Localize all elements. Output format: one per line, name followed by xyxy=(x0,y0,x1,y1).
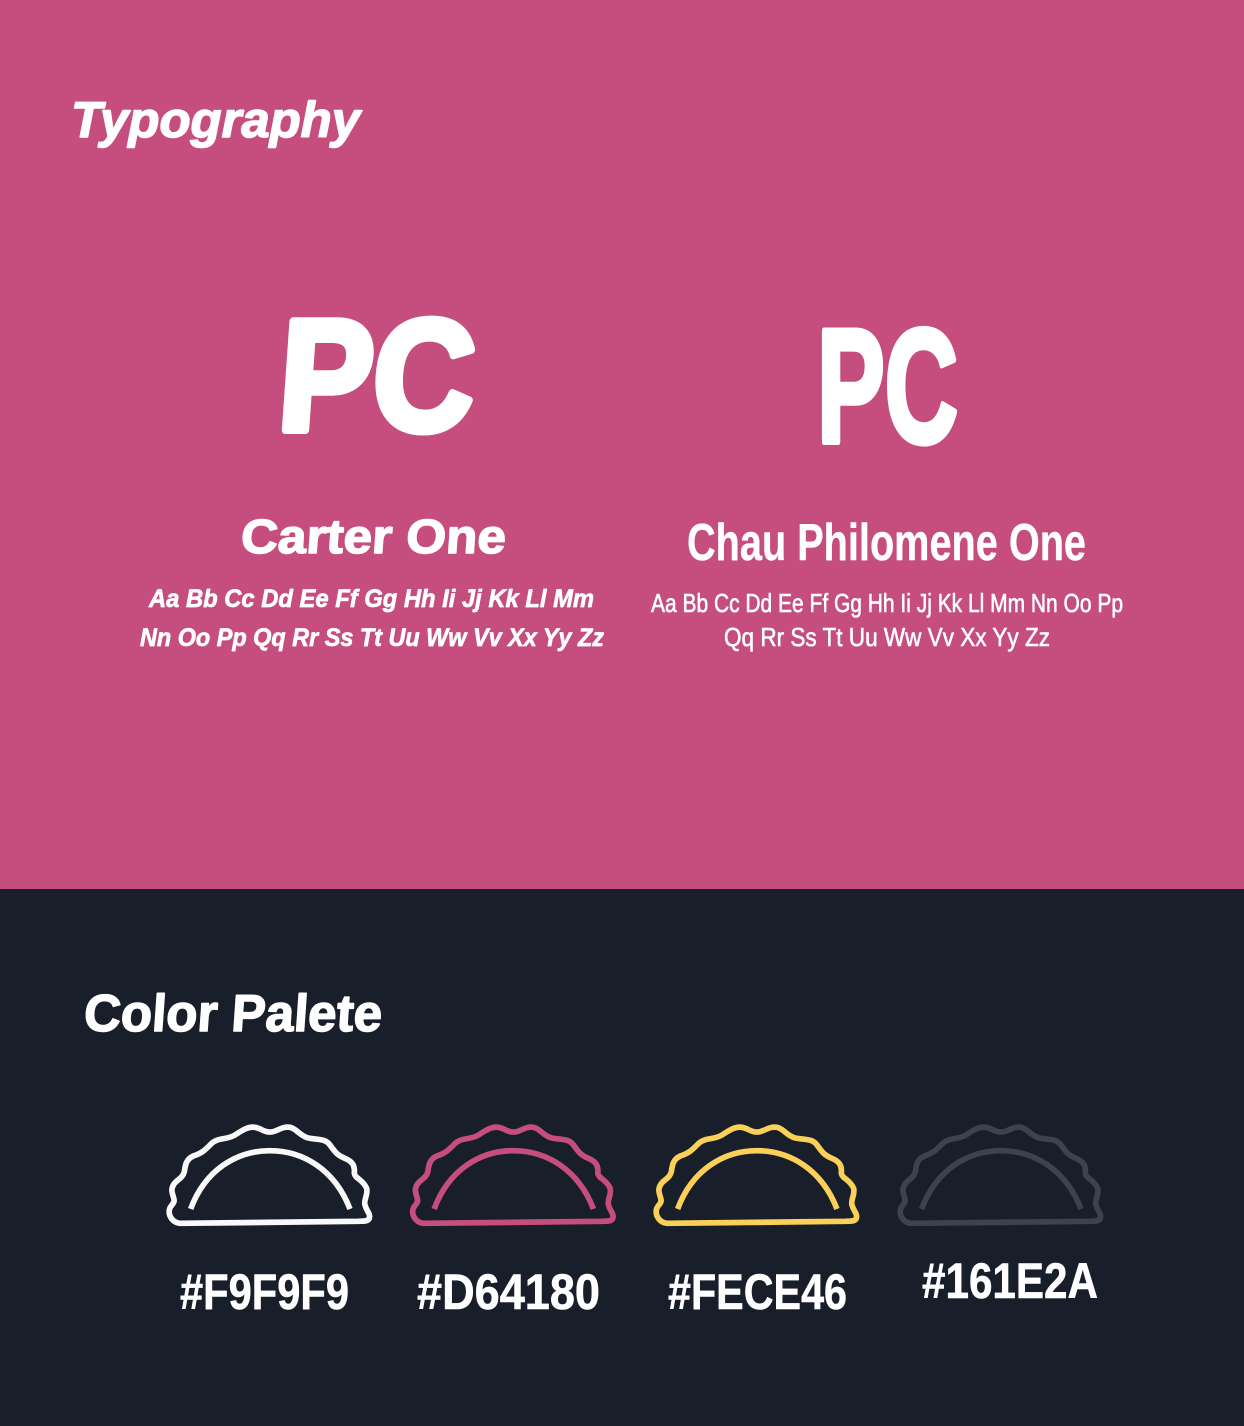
glyph sample: Carter One PC: PC xyxy=(274,287,481,464)
alphabet: Chau Philomene One: Aa Bb Cc Dd Ee Ff Gg Hh Ii Jj Kk Ll Mm Nn Oo Pp xyxy=(651,588,1123,618)
font specimen: Carter One xyxy=(140,287,604,652)
heading: Color Palete: Color Palete xyxy=(82,985,384,1043)
alphabet: Chau Philomene One xyxy=(651,588,1123,652)
alphabet: Carter One xyxy=(140,585,604,652)
icon: yellow empanada xyxy=(656,1127,857,1223)
alphabet: Carter One: Nn Oo Pp Qq Rr Ss Tt Uu Ww Vv Xx Yy Zz xyxy=(140,624,604,652)
font name: Carter One: Carter One xyxy=(239,511,508,564)
icon: pink empanada xyxy=(413,1127,613,1223)
label: #FECE46: #FECE46 xyxy=(668,1264,847,1320)
alphabet: Chau Philomene One: Qq Rr Ss Tt Uu Ww Vv Xx Yy Zz xyxy=(724,622,1050,652)
label: #F9F9F9: #F9F9F9 xyxy=(180,1264,349,1320)
panel: color palette background xyxy=(0,889,1244,1426)
font specimen: Chau Philomene One xyxy=(651,296,1123,652)
glyph sample: Chau Philomene One PC: PC xyxy=(817,296,958,477)
heading: Typography: Typography xyxy=(71,92,362,148)
icon: white empanada xyxy=(169,1127,370,1223)
panel: typography background xyxy=(0,0,1244,889)
label: #161E2A: #161E2A xyxy=(922,1253,1098,1309)
font name: Chau Philomene One: Chau Philomene One xyxy=(687,514,1086,572)
alphabet: Carter One: Aa Bb Cc Dd Ee Ff Gg Hh Ii Jj Kk Ll Mm xyxy=(148,585,594,613)
label: #D64180: #D64180 xyxy=(417,1264,600,1320)
icon: dark grey empanada xyxy=(900,1127,1101,1223)
